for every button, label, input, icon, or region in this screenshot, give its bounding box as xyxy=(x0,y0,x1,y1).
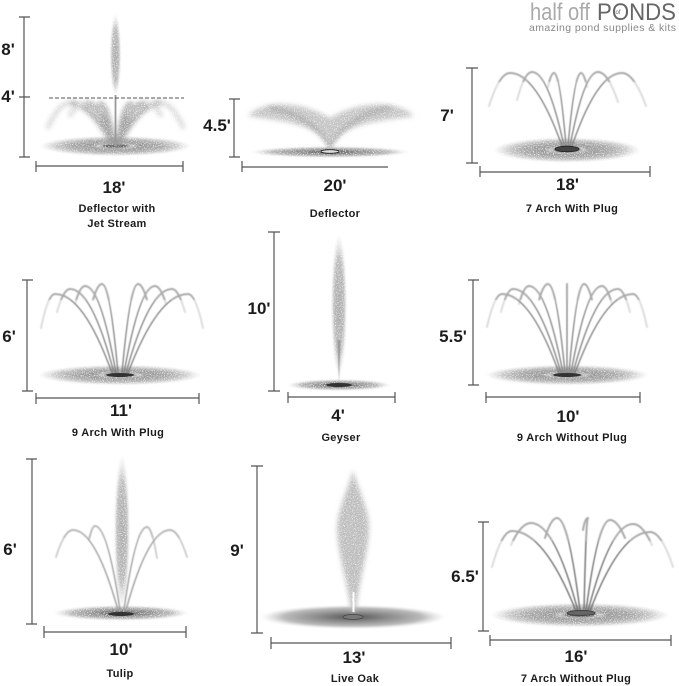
fountain: geyser xyxy=(287,233,391,390)
panel: 7 arch without plug xyxy=(451,518,673,685)
label: 6 ft: 6' xyxy=(3,540,17,559)
width dimension xyxy=(44,626,186,638)
width dimension xyxy=(36,393,199,404)
caption: Deflector with xyxy=(79,203,155,215)
panel: live oak xyxy=(230,466,451,685)
caption: 7 Arch With Plug xyxy=(526,203,618,215)
label: 18 ft: 18' xyxy=(103,178,125,197)
fountain: deflector xyxy=(248,104,414,158)
width dimension xyxy=(490,635,671,646)
caption: 9 Arch Without Plug xyxy=(517,432,627,444)
label: 10 ft: 10' xyxy=(557,407,579,426)
logo xyxy=(529,0,676,34)
width dimension xyxy=(288,392,395,403)
label: 10 ft: 10' xyxy=(110,640,132,659)
caption: Live Oak xyxy=(331,673,380,685)
height dimension xyxy=(268,232,280,391)
label: 13 ft: 13' xyxy=(343,648,365,667)
label: 6 ft: 6' xyxy=(2,327,16,346)
caption: Tulip xyxy=(107,668,133,680)
caption: Jet Stream xyxy=(87,218,147,230)
fountain: deflector with jet stream xyxy=(40,13,192,156)
label: 4.5 ft: 4.5' xyxy=(203,116,231,135)
label: 4 ft: 4' xyxy=(1,87,15,106)
label: 16 ft: 16' xyxy=(565,647,587,666)
logo: of xyxy=(615,10,621,16)
caption: Geyser xyxy=(321,432,361,444)
width dimension xyxy=(486,392,640,403)
label: 6.5 ft: 6.5' xyxy=(451,567,479,586)
fountain: 7 arch without plug xyxy=(490,518,673,627)
height dimension xyxy=(466,68,478,163)
label: 8 ft: 8' xyxy=(1,40,15,59)
fountain: 9 arch with plug xyxy=(38,284,203,385)
label: 20 ft: 20' xyxy=(324,176,346,195)
fountain: tulip xyxy=(53,454,189,620)
height dimension xyxy=(26,459,37,624)
width dimension xyxy=(242,161,388,172)
fountain: live oak xyxy=(260,470,446,629)
label: 5.5 ft: 5.5' xyxy=(439,327,467,346)
fountain: 9 arch without plug xyxy=(485,284,649,385)
height dimension xyxy=(22,280,33,391)
height dimension xyxy=(478,522,489,631)
panel: 9 arch with plug xyxy=(2,280,203,439)
caption: 7 Arch Without Plug xyxy=(521,673,631,685)
panel: tulip xyxy=(3,454,189,680)
height dimension xyxy=(229,99,240,157)
panel: 9 arch without plug xyxy=(439,280,649,444)
panel: deflector with jet stream xyxy=(1,13,192,230)
panel: geyser xyxy=(248,232,395,444)
width dimension xyxy=(480,166,650,177)
label: 9 ft: 9' xyxy=(230,541,244,560)
caption: Deflector xyxy=(310,208,361,220)
label: 18 ft: 18' xyxy=(556,175,579,194)
fountain: 7 arch with plug xyxy=(489,72,646,162)
panel: 7 arch with plug xyxy=(440,68,650,215)
panel: deflector xyxy=(203,99,414,220)
label: 10 ft: 10' xyxy=(248,299,270,318)
width dimension xyxy=(36,161,183,172)
label: 7 ft: 7' xyxy=(440,106,454,125)
caption: 9 Arch With Plug xyxy=(72,427,164,439)
height dimension xyxy=(468,280,479,385)
dashed 4 foot line xyxy=(49,97,184,99)
logo: amazing pond supplies & kits xyxy=(529,22,676,34)
label: 11 ft: 11' xyxy=(110,401,132,420)
height dimension xyxy=(251,466,263,633)
width dimension xyxy=(271,637,451,649)
height dimension xyxy=(19,17,30,157)
label: 4 ft: 4' xyxy=(331,406,345,425)
